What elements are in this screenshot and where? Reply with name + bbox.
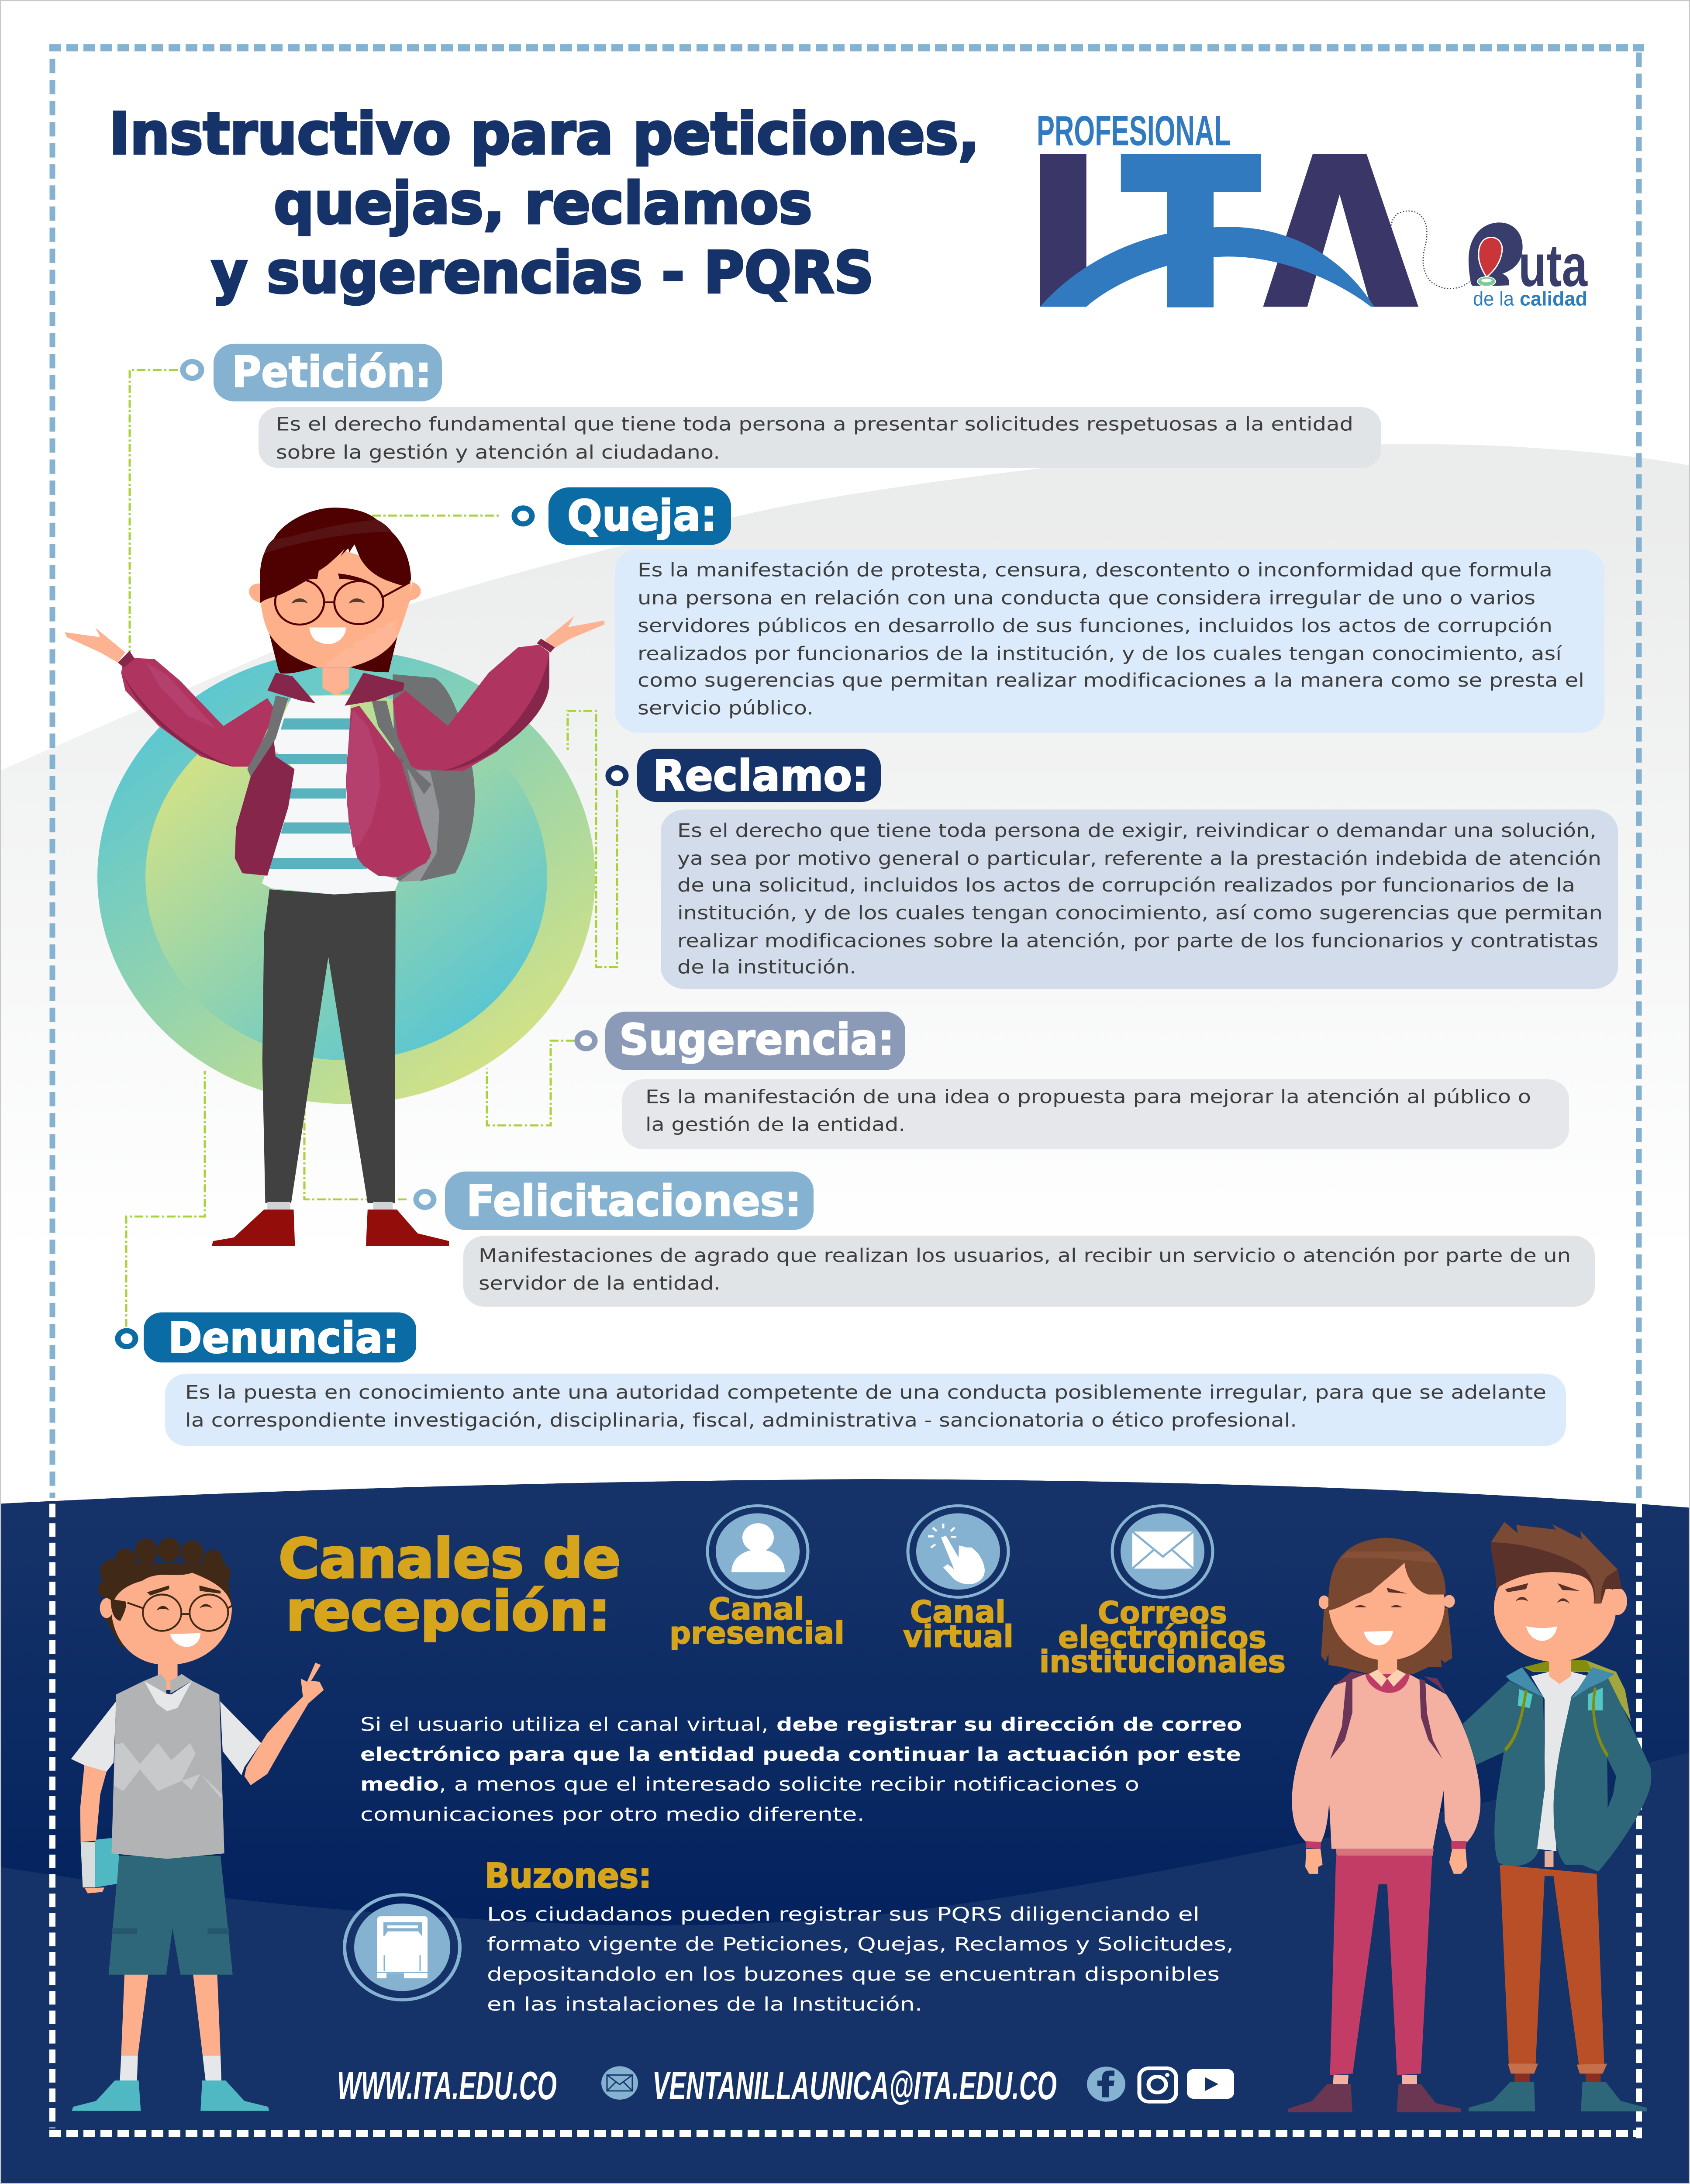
collar xyxy=(267,673,404,706)
sleeves and arms xyxy=(80,1765,107,1842)
text panel: Reclamo: ya sea por motivo general o particular, referente a la prestación indebida de atención xyxy=(677,847,1601,869)
shirt xyxy=(262,695,399,895)
temple xyxy=(383,582,410,597)
logo: Profesional ITA, Ruta de la calidad: PROFESIONAL xyxy=(1037,107,1231,154)
icon: mailbox xyxy=(345,1895,460,2000)
text panel: Felicitaciones: Manifestaciones de agrado que realizan los usuarios, al recibir un servicio o atención por parte de un xyxy=(479,1244,1571,1266)
heading: Petición: Petición: xyxy=(232,348,431,397)
girl xyxy=(1288,1538,1480,2112)
straps xyxy=(1330,1672,1446,1759)
text block: canal virtual note: , a menos que el interesado solicite recibir notificaciones o xyxy=(439,1773,1139,1795)
text panel: Reclamo: realizar modificaciones sobre la atención, por parte de los funcionarios y contratistas xyxy=(677,930,1598,952)
legs xyxy=(121,1974,221,2056)
text panel: Queja: como sugerencias que permitan realizar modificaciones a la manera como se presta el xyxy=(638,669,1584,691)
boy xyxy=(1462,1522,1651,2111)
channel: Correos electrónicos institucionales: institucionales xyxy=(1039,1645,1286,1679)
boy and girl characters xyxy=(1288,1522,1651,2112)
heading: Canales de recepción: Canales de xyxy=(279,1527,621,1590)
cuffs and hands xyxy=(1306,1841,1466,1849)
heading: Canales de recepción: recepción: xyxy=(286,1579,610,1643)
channel: Canal virtual xyxy=(903,1506,1014,1655)
book xyxy=(95,1838,119,1887)
text panel: Petición xyxy=(259,407,1381,468)
text panel: Reclamo: de una solicitud, incluidos los actos de corrupción realizados por funcionarios de la xyxy=(677,874,1575,896)
icon: pointing hand xyxy=(908,1506,1008,1597)
hands xyxy=(65,616,604,663)
text block: canal virtual note: debe registrar su dirección de correo xyxy=(776,1714,1242,1735)
connector lines xyxy=(126,370,617,1327)
text block: Buzones xyxy=(487,1903,1234,2015)
text panel: Denuncia xyxy=(165,1374,1566,1446)
website: WWW.ITA.EDU.CO xyxy=(337,2063,557,2108)
hair back xyxy=(1321,1608,1452,1674)
logo: Profesional ITA, Ruta de la calidad: uta xyxy=(1518,232,1588,299)
heading: Denuncia: Denuncia: xyxy=(168,1313,399,1363)
logo: Profesional ITA, Ruta de la calidad xyxy=(1037,107,1588,310)
icon: facebook xyxy=(1087,2067,1125,2101)
mouth xyxy=(309,628,346,644)
text block: Buzones: formato vigente de Peticiones, Quejas, Reclamos y Solicitudes, xyxy=(487,1933,1234,1955)
text block: canal virtual note xyxy=(360,1714,1242,1825)
text block: Buzones: depositandolo en los buzones que se encuentran disponibles xyxy=(487,1963,1220,1985)
heading: Felicitaciones xyxy=(416,1171,814,1230)
text panel: Sugerencia: la gestión de la entidad. xyxy=(645,1113,905,1136)
text block: canal virtual note: electrónico para que la entidad pueda continuar la actuación por este xyxy=(360,1743,1241,1765)
channel: Correos electrónicos institucionales: Correos xyxy=(1098,1596,1227,1631)
heading: Queja: Queja: xyxy=(567,491,717,541)
icon: email xyxy=(601,2066,638,2100)
icon: instagram xyxy=(1139,2068,1176,2101)
trousers xyxy=(262,889,396,1203)
backpack xyxy=(393,674,475,881)
logo: Profesional ITA, Ruta de la calidad: calidad xyxy=(1520,288,1587,310)
text block: Buzones: Los ciudadanos pueden registrar sus PQRS diligenciando el xyxy=(487,1903,1200,1925)
navy footer panel xyxy=(0,1479,1690,2184)
trousers xyxy=(1330,1856,1432,2075)
channel: Canal virtual: virtual xyxy=(903,1620,1014,1655)
neck xyxy=(322,668,349,695)
channel: Canal presencial xyxy=(669,1506,845,1651)
backpack xyxy=(1524,1660,1631,1722)
logo: Profesional ITA, Ruta de la calidad: de la xyxy=(1473,288,1514,310)
text panel: Queja: una persona en relación con una conducta que considera irregular de uno o varios xyxy=(638,587,1535,609)
shorts xyxy=(109,1856,233,1975)
cuffs xyxy=(118,639,555,668)
ears xyxy=(249,582,421,603)
gradient circle behind woman xyxy=(97,650,595,1104)
heading: Buzones: Buzones: xyxy=(485,1856,652,1896)
woman character xyxy=(65,508,604,1246)
heading: Sugerencia xyxy=(577,1012,905,1070)
face xyxy=(261,546,411,667)
head xyxy=(1494,1555,1616,1662)
text panel: Reclamo: de la institución. xyxy=(677,956,856,978)
grey swoosh background xyxy=(0,444,1690,1512)
channel: Correos electrónicos institucionales xyxy=(1039,1506,1286,1679)
text panel: Queja: realizados por funcionarios de la institución, y de los cuales tengan conocimiento, así xyxy=(638,643,1562,664)
hair xyxy=(260,508,411,603)
eyebrows xyxy=(147,1586,221,1596)
text panel: Sugerencia: Es la manifestación de una idea o propuesta para mejorar la atención al público o xyxy=(645,1086,1531,1108)
heading: Queja xyxy=(514,487,731,545)
sweater xyxy=(1292,1674,1480,1849)
heading: Canales de recepción xyxy=(279,1527,621,1643)
text panel: Queja: servicio público. xyxy=(638,697,814,719)
channel: Canal presencial: presencial xyxy=(669,1616,845,1651)
text panel: Queja: servidores públicos en desarrollo de sus funciones, incluidos los actos de corrupción xyxy=(638,615,1552,637)
text panel: Queja xyxy=(615,549,1604,733)
glasses lenses xyxy=(275,580,383,625)
text block: Buzones: en las instalaciones de la Institución. xyxy=(487,1993,922,2015)
text block: canal virtual note: medio xyxy=(360,1773,439,1795)
title: quejas, reclamos xyxy=(274,170,812,237)
vest xyxy=(111,1681,224,1859)
mouth xyxy=(170,1633,200,1647)
jacket xyxy=(1462,1681,1521,1765)
heading: Reclamo: Reclamo: xyxy=(653,751,869,801)
jacket xyxy=(235,739,294,876)
title: y sugerencias - PQRS xyxy=(211,239,874,306)
shoes xyxy=(212,1209,449,1246)
text panel: Felicitaciones: servidor de la entidad. xyxy=(479,1272,721,1294)
text block: canal virtual note: Si el usuario utiliza el canal virtual, xyxy=(360,1714,769,1735)
shoes xyxy=(72,2080,269,2111)
hair xyxy=(98,1538,232,1647)
glasses xyxy=(128,1594,233,1631)
text panel: Petición: sobre la gestión y atención al ciudadano. xyxy=(276,441,720,463)
eyes xyxy=(291,598,365,604)
heading: Sugerencia: Sugerencia: xyxy=(619,1015,894,1064)
text panel: Sugerencia xyxy=(622,1079,1569,1149)
shirt xyxy=(1531,1672,1589,1851)
icon: youtube xyxy=(1187,2069,1234,2099)
text panel: Reclamo: Es el derecho que tiene toda persona de exigir, reivindicar o demandar una solución, xyxy=(677,819,1597,842)
text panel: Petición: Es el derecho fundamental que tiene toda persona a presentar solicitudes respetuosas a la entidad xyxy=(276,413,1353,435)
text panel: Queja: Es la manifestación de protesta, censura, descontento o inconformidad que formula xyxy=(638,559,1552,581)
text panel: Denuncia: la correspondiente investigación, disciplinaria, fiscal, administrativa - sancionatoria o ético profesional. xyxy=(185,1409,1297,1431)
face xyxy=(112,1573,232,1665)
heading: Petición xyxy=(183,344,442,401)
heading: Felicitaciones: Felicitaciones: xyxy=(466,1177,801,1226)
straps xyxy=(247,695,431,795)
text panel: Denuncia: Es la puesta en conocimiento ante una autoridad competente de una conducta posiblemente irregular, para que se adelante xyxy=(185,1381,1546,1403)
trousers xyxy=(1500,1865,1604,2065)
text panel: Felicitaciones xyxy=(463,1236,1595,1307)
eyebrow xyxy=(338,574,372,584)
channel: Canal presencial: Canal xyxy=(708,1592,804,1627)
email address: VENTANILLAUNICA@ITA.EDU.CO xyxy=(652,2063,1057,2108)
hair back xyxy=(269,632,397,674)
text panel: Reclamo: institución, y de los cuales tengan conocimiento, así como sugerencias que permitan xyxy=(677,902,1603,924)
man character xyxy=(71,1538,324,2111)
head xyxy=(1328,1547,1445,1660)
icon: envelope xyxy=(1112,1506,1213,1597)
icon: person xyxy=(707,1506,808,1597)
channel: Correos electrónicos institucionales: electrónicos xyxy=(1058,1620,1266,1655)
neck xyxy=(158,1662,178,1690)
channel: Canal virtual: Canal xyxy=(910,1595,1006,1630)
text panel: Reclamo xyxy=(661,809,1618,989)
title: Instructivo para peticiones, xyxy=(109,101,980,167)
title xyxy=(109,101,980,306)
text block: canal virtual note: comunicaciones por otro medio diferente. xyxy=(360,1803,865,1825)
